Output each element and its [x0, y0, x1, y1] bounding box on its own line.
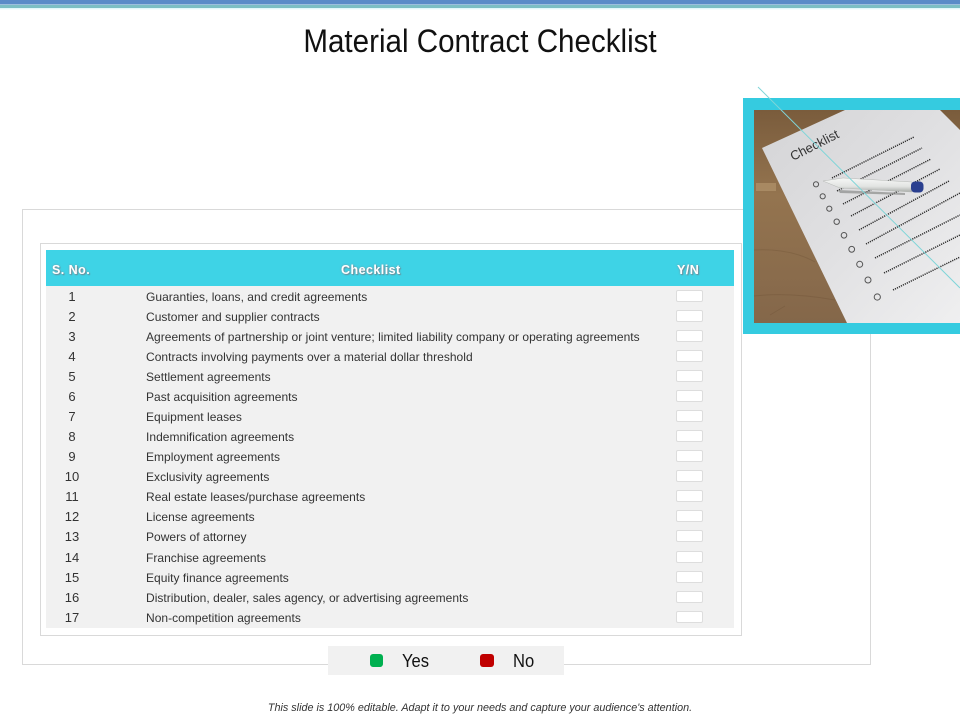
row 16: 16 — [65, 590, 79, 605]
row 13: 13 — [65, 529, 79, 544]
row 1: Guaranties, loans, and credit agreements — [146, 290, 367, 304]
row 6: 6 — [68, 389, 76, 404]
legend: no swatch — [480, 654, 494, 667]
row 8: Indemnification agreements — [146, 430, 294, 444]
legend — [328, 646, 564, 675]
header: checklist: Checklist — [341, 263, 401, 277]
row 17: Non-competition agreements — [146, 611, 301, 625]
row 7 — [68, 409, 703, 424]
desk — [754, 110, 960, 323]
row 17: 17 — [65, 610, 79, 625]
legend: yes swatch — [370, 654, 383, 667]
row 14 — [65, 550, 703, 565]
row 4: Contracts involving payments over a material dollar threshold — [146, 350, 473, 364]
row 11: 11 — [65, 489, 79, 504]
row 12: 12 — [65, 509, 79, 524]
row 15: 15 — [65, 570, 79, 585]
row 4: 4 — [68, 349, 76, 364]
row 13 — [65, 529, 703, 544]
header: yes or no: Y/N — [677, 263, 699, 277]
row 12 — [65, 509, 703, 524]
row 16 — [65, 590, 703, 605]
diagonal line — [758, 87, 960, 288]
row 3: Agreements of partnership or joint venture; limited liability company or operating agreements — [146, 330, 640, 344]
row 11 — [65, 489, 703, 504]
wood grain — [754, 250, 835, 315]
row 12: License agreements — [146, 510, 255, 524]
row 8 — [68, 429, 703, 444]
row 5 — [68, 369, 703, 384]
title: Material Contract Checklist — [303, 23, 657, 59]
footer note: This slide is 100% editable. Adapt it to your needs and capture your audience's attention. — [268, 702, 692, 714]
header: serial number: S. No. — [52, 263, 90, 277]
row 13: Powers of attorney — [146, 530, 247, 544]
row 4 — [68, 349, 703, 364]
row 17 — [65, 610, 703, 625]
photo frame — [743, 98, 960, 334]
row 9: 9 — [68, 449, 76, 464]
row 10: 10 — [65, 469, 79, 484]
row 14: Franchise agreements — [146, 551, 266, 565]
row 14: 14 — [65, 550, 79, 565]
row 15 — [65, 570, 703, 585]
row 9: Employment agreements — [146, 450, 280, 464]
row 8: 8 — [68, 429, 76, 444]
row 7: 7 — [68, 409, 76, 424]
row 10 — [65, 469, 703, 484]
legend: no label: No — [513, 651, 534, 671]
row 5: 5 — [68, 369, 76, 384]
row 1: 1 — [68, 289, 76, 304]
row 16: Distribution, dealer, sales agency, or advertising agreements — [146, 591, 468, 605]
row 1 — [68, 289, 703, 304]
row 6 — [68, 389, 703, 404]
legend: yes label: Yes — [402, 651, 429, 671]
heading on paper: Checklist — [788, 126, 842, 164]
row 11: Real estate leases/purchase agreements — [146, 490, 365, 504]
row 2 — [68, 309, 703, 324]
row 2: Customer and supplier contracts — [146, 310, 320, 324]
pen — [823, 178, 924, 195]
check circles — [813, 182, 880, 300]
paper sheet — [762, 110, 960, 323]
row 9 — [68, 449, 703, 464]
row 5: Settlement agreements — [146, 370, 271, 384]
dotted lines — [832, 137, 960, 290]
row 15: Equity finance agreements — [146, 571, 289, 585]
panel: outer frame — [22, 209, 871, 665]
wood highlight — [756, 183, 776, 191]
table body — [46, 286, 734, 628]
row 7: Equipment leases — [146, 410, 242, 424]
table header — [46, 250, 734, 286]
row 3: 3 — [68, 329, 76, 344]
top header band — [0, 0, 960, 10]
panel: inner table frame — [40, 243, 742, 636]
row 10: Exclusivity agreements — [146, 470, 269, 484]
row 2: 2 — [68, 309, 76, 324]
row 6: Past acquisition agreements — [146, 390, 298, 404]
